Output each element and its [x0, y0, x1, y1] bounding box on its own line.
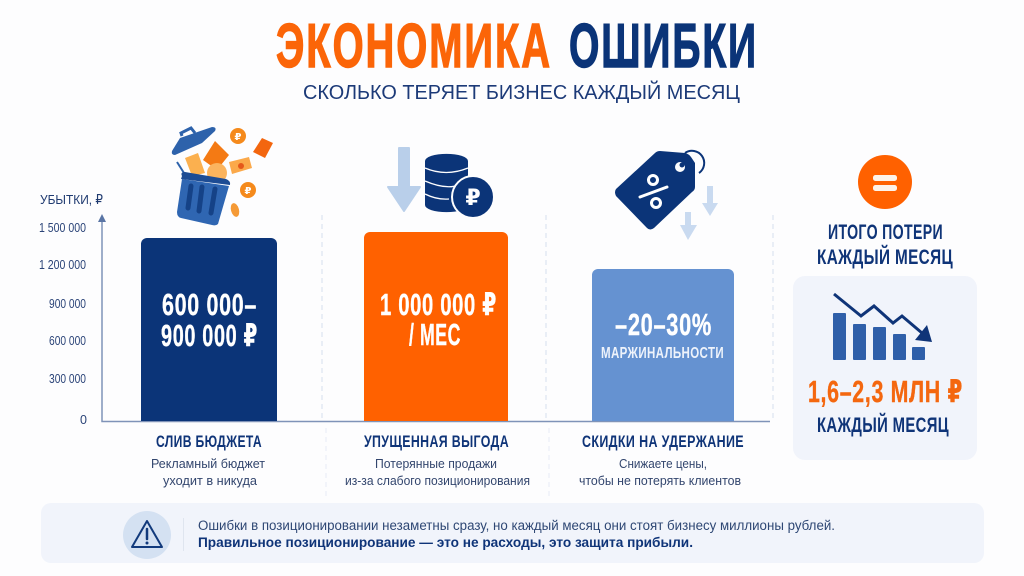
column text: discounts: СКИДКИ НА УДЕРЖАНИЕ [582, 432, 744, 451]
axis title: УБЫТКИ, ₽ [40, 192, 103, 207]
axis labels: 900 000 [49, 297, 86, 311]
column text: budget drain: СЛИВ БЮДЖЕТА [156, 432, 262, 451]
total caption: КАЖДЫЙ МЕСЯЦ [817, 413, 949, 437]
icon: coins with ruble and down arrow: ₽ [465, 185, 481, 210]
icon: equals sign [858, 155, 912, 209]
axis labels [39, 221, 87, 427]
column text: budget drain: Рекламный бюджет [151, 457, 265, 471]
bar: retention discounts [592, 269, 734, 421]
bar: lost profit: / МЕС [409, 317, 461, 352]
axis labels: 0 [80, 413, 87, 427]
bar: lost profit: 1 000 000 ₽ [380, 287, 497, 322]
panel: total [793, 276, 977, 460]
total heading: ИТОГО ПОТЕРИ [828, 221, 943, 244]
bar: lost profit [364, 232, 508, 421]
icon: discount tag [615, 151, 718, 240]
axis labels: 600 000 [49, 334, 86, 348]
icon: falling bar chart [833, 294, 932, 360]
column text: lost profit: УПУЩЕННАЯ ВЫГОДА [364, 432, 509, 451]
axis labels: 1 500 000 [39, 221, 86, 235]
note text [198, 518, 835, 550]
bar: budget drain: 600 000– [162, 287, 257, 322]
column text: budget drain: уходит в никуда [163, 474, 257, 488]
note text: Ошибки в позиционировании незаметны сразу, но каждый месяц они стоят бизнесу миллионы рублей. [198, 518, 835, 533]
column text: lost profit: из-за слабого позиционирования [345, 474, 530, 488]
bar: retention discounts: –20–30% [615, 307, 712, 342]
icon: coins with ruble and down arrow [388, 148, 494, 218]
column text: lost profit: Потерянные продажи [375, 457, 497, 471]
column text: discounts: чтобы не потерять клиентов [579, 474, 741, 488]
icon: trash can with money: ₽ [235, 132, 242, 143]
title: ЭКОНОМИКА [276, 12, 552, 81]
bar: retention discounts: МАРЖИНАЛЬНОСТИ [601, 345, 724, 362]
total heading [817, 221, 953, 269]
axis labels: 1 200 000 [39, 258, 86, 272]
icon: trash can with money [172, 127, 273, 225]
axis labels: 300 000 [49, 372, 86, 386]
subtitle: СКОЛЬКО ТЕРЯЕТ БИЗНЕС КАЖДЫЙ МЕСЯЦ [303, 80, 740, 104]
panel: warning note [41, 503, 984, 563]
total heading: КАЖДЫЙ МЕСЯЦ [817, 245, 953, 269]
column text: discounts: Снижаете цены, [619, 457, 707, 471]
chart: losses by category [39, 192, 773, 500]
note text: Правильное позиционирование — это не расходы, это защита прибыли. [198, 535, 693, 550]
icon: trash can with money: ₽ [245, 186, 252, 197]
column text: lost profit [345, 432, 530, 488]
column text: budget drain [151, 432, 265, 488]
axes [98, 214, 770, 422]
icon: warning [123, 511, 171, 559]
title: ОШИБКИ [569, 12, 758, 81]
bar: budget drain [141, 238, 277, 421]
bar: budget drain: 900 000 ₽ [161, 318, 258, 353]
column text: discounts [579, 432, 744, 488]
